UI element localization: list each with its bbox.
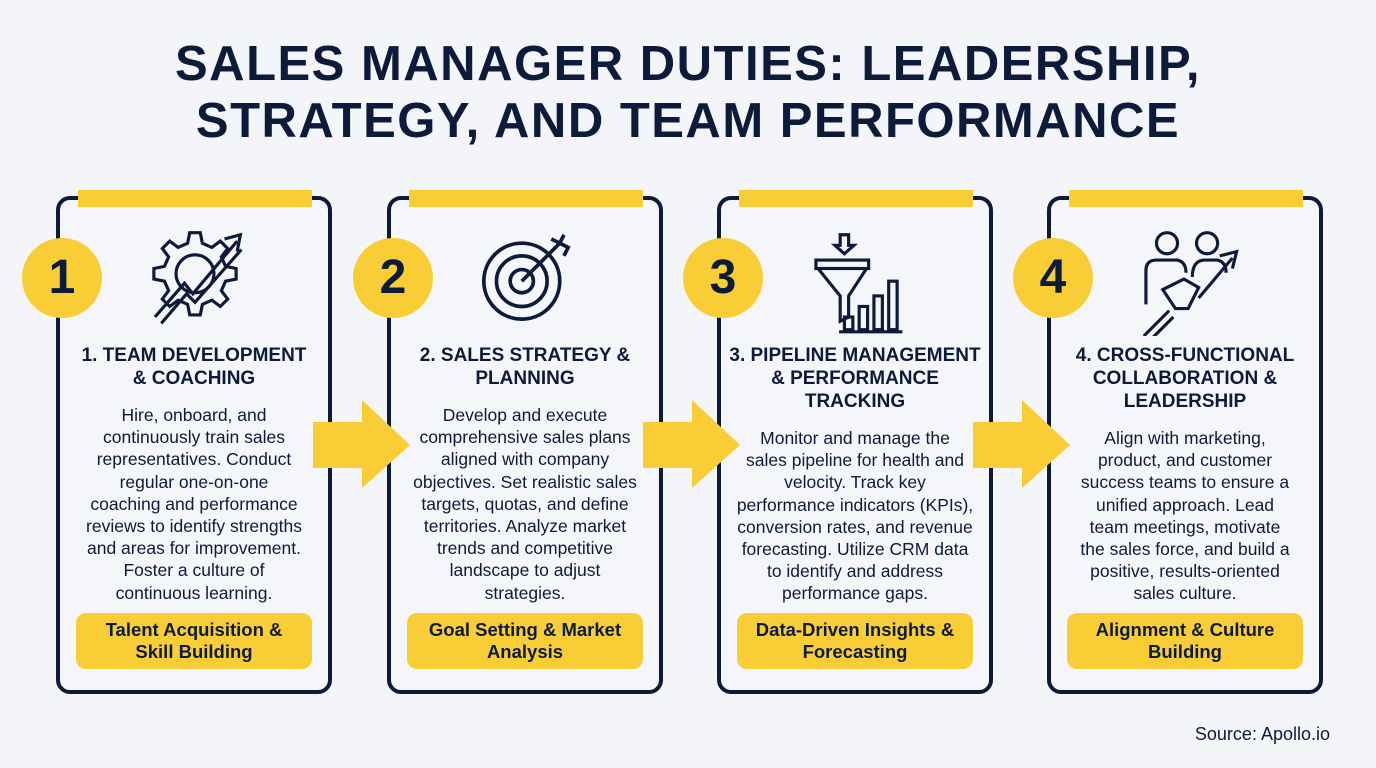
heading: COLLABORATION & [1093, 368, 1277, 389]
body text: strategies. [485, 583, 565, 603]
body text: coaching and performance [90, 494, 298, 514]
heading: & PERFORMANCE [771, 368, 939, 389]
body text: territories. Analyze market [424, 516, 626, 536]
panel: team development [56, 196, 332, 694]
body text: aligned with company [441, 449, 609, 469]
body text: team meetings, motivate [1090, 517, 1280, 537]
icon: people handshake [1142, 231, 1239, 336]
heading: 4. CROSS-FUNCTIONAL [1076, 345, 1294, 366]
tag: Alignment & Culture [1096, 619, 1274, 640]
body text: unified approach. Lead [1096, 495, 1274, 515]
number badge 2: 2 [380, 251, 406, 304]
tag: Analysis [487, 641, 563, 662]
body text [86, 405, 302, 603]
panel: sales strategy [387, 196, 663, 694]
heading: PLANNING [475, 368, 575, 389]
body text: targets, quotas, and define [421, 494, 629, 514]
body text: product, and customer [1098, 450, 1272, 470]
number badge 1: 1 [49, 251, 75, 304]
body text: Align with marketing, [1104, 428, 1266, 448]
tag: Skill Building [135, 641, 253, 662]
heading: 3. PIPELINE MANAGEMENT [729, 345, 981, 366]
source: Source: Apollo.io [1195, 724, 1330, 744]
panel: pipeline management [717, 196, 993, 694]
body text: success teams to ensure a [1081, 472, 1289, 492]
heading [82, 345, 306, 389]
body text: forecasting. Utilize CRM data [742, 539, 968, 559]
number badge 4 [1013, 238, 1093, 318]
body text: velocity. Track key [784, 472, 926, 492]
title: STRATEGY, AND TEAM PERFORMANCE [196, 94, 1180, 148]
number badge 3 [683, 238, 763, 318]
icon: gear with arrow [152, 231, 242, 324]
arrow 1 [313, 400, 410, 488]
body text [737, 428, 973, 603]
body text: performance indicators (KPIs), [737, 495, 973, 515]
body text: the sales force, and build a [1080, 539, 1290, 559]
tag: Goal Setting & Market [429, 619, 621, 640]
body text: Hire, onboard, and [122, 405, 266, 425]
body text: Develop and execute [443, 405, 607, 425]
heading: LEADERSHIP [1124, 391, 1246, 412]
body text [1080, 428, 1290, 603]
number badge 2 [353, 238, 433, 318]
icon: funnel with bars [814, 233, 902, 334]
tag [1067, 613, 1303, 669]
tag: Forecasting [803, 641, 907, 662]
body text: trends and competitive [437, 538, 613, 558]
body text: Monitor and manage the [760, 428, 950, 448]
body text: landscape to adjust [450, 560, 600, 580]
tag: Building [1148, 641, 1222, 662]
heading [420, 345, 630, 389]
body text: reviews to identify strengths [86, 516, 302, 536]
tag [407, 613, 643, 669]
tag: Data-Driven Insights & [756, 619, 954, 640]
body text: sales culture. [1133, 583, 1237, 603]
body text: comprehensive sales plans [419, 427, 631, 447]
tag [737, 613, 973, 669]
title [175, 37, 1201, 148]
body text: positive, results-oriented [1090, 561, 1280, 581]
number badge 1 [22, 238, 102, 318]
arrow 2 [643, 400, 740, 488]
heading: 2. SALES STRATEGY & [420, 345, 630, 366]
heading: & COACHING [133, 368, 255, 389]
icon: target [482, 234, 571, 321]
body text: continuously train sales [103, 427, 285, 447]
heading: 1. TEAM DEVELOPMENT [82, 345, 306, 366]
tag: Talent Acquisition & [106, 619, 282, 640]
body text: representatives. Conduct [97, 449, 291, 469]
number badge 4: 4 [1040, 251, 1066, 304]
heading: TRACKING [805, 391, 905, 412]
heading [729, 345, 981, 412]
body text: to identify and address [767, 561, 943, 581]
body text: performance gaps. [782, 583, 928, 603]
body text: objectives. Set realistic sales [413, 472, 637, 492]
body text: continuous learning. [116, 583, 272, 603]
body text: and areas for improvement. [87, 538, 301, 558]
body text: sales pipeline for health and [746, 450, 964, 470]
body text [413, 405, 637, 603]
body text: regular one-on-one [120, 472, 268, 492]
title: SALES MANAGER DUTIES: LEADERSHIP, [175, 37, 1201, 91]
panel: collaboration [1047, 196, 1323, 694]
arrow 3 [973, 400, 1070, 488]
tag [76, 613, 312, 669]
body text: conversion rates, and revenue [737, 517, 973, 537]
body text: Foster a culture of [123, 560, 265, 580]
number badge 3: 3 [710, 251, 736, 304]
heading [1076, 345, 1294, 412]
